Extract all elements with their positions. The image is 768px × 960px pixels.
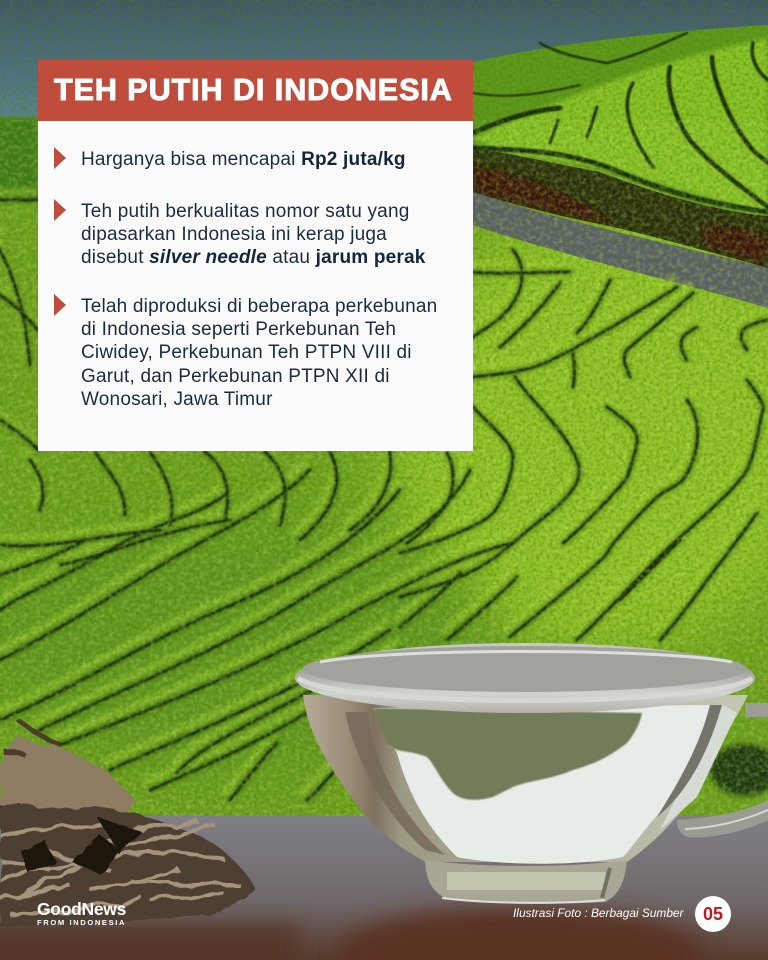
sky [0,0,768,130]
bullet 2: disebut silver needle atau jarum perak [81,247,426,268]
photo credit: Ilustrasi Foto : Berbagai Sumber [513,906,684,920]
cup liquid white reflection [373,705,710,864]
left glass stripes [345,712,445,855]
bullet 3 [54,294,437,410]
bullet 2: Teh putih berkualitas nomor satu yang [81,201,409,222]
heading [38,60,473,121]
bullet 1: Harganya bisa mencapai Rp2 juta/kg [81,149,406,170]
gray band right [657,705,722,817]
panel: text card [38,60,473,451]
bullet 3: Telah diproduksi di beberapa perkebunan [81,296,437,317]
logo: GoodNews [37,899,126,919]
bullet 2 [54,199,426,268]
heading: TEH PUTIH DI INDONESIA [54,73,453,107]
tea row lines main field [0,200,767,800]
dark hedge at right [710,744,768,796]
bullet 3: Wonosari, Jawa Timur [81,389,273,410]
cup handle [745,703,768,717]
logo: FROM INDONESIA [37,918,126,927]
cup body [303,695,748,862]
cup rim [295,643,755,713]
upper right hill [473,25,768,230]
right glass lighter band [660,705,737,830]
bullet 3: Ciwidey, Perkebunan Teh PTPN VIII di [81,342,412,363]
hill shadow bank [473,148,768,268]
cup foot [425,860,627,904]
bullet 2: dipasarkan Indonesia ini kerap juga [81,224,387,245]
tea row lines upper right [473,33,768,212]
main field [0,118,768,830]
road [473,192,768,308]
row soft shadows [0,200,767,800]
bullet 3: di Indonesia seperti Perkebunan Teh [81,319,396,340]
bullet 3: Garut, dan Perkebunan PTPN XII di [81,366,390,387]
page number [695,896,731,932]
leaves pile [0,722,255,926]
table [0,816,768,960]
page number: 05 [703,904,723,924]
reflection [335,907,705,960]
row highlights [0,192,763,792]
tree reflection [373,708,642,800]
